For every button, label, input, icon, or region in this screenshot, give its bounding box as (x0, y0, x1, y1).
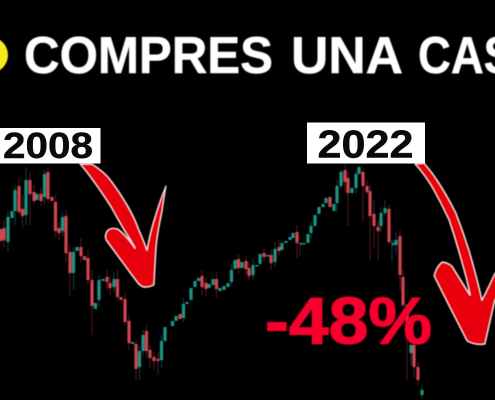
title: COMPRES (24, 27, 273, 85)
title: UNA (291, 27, 403, 85)
label: 2022: 2022 (318, 124, 414, 166)
title (24, 27, 495, 85)
arrow: 2022 drop (415, 163, 495, 345)
label: 2008: 2008 (3, 125, 93, 166)
green candle bodies (8, 167, 422, 395)
callout: minus 48 percent: -48% (265, 284, 432, 358)
icon: yellow emoji partly cropped (0, 37, 8, 73)
chart wicks (4, 165, 422, 398)
red candle bodies (1, 170, 418, 380)
arrow: 2008 drop (80, 164, 166, 287)
candlestick chart (1, 165, 422, 398)
